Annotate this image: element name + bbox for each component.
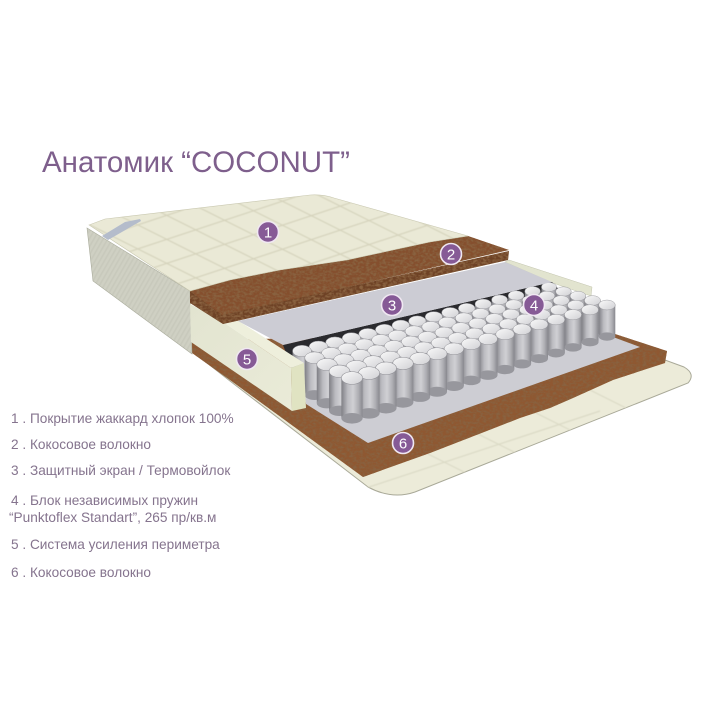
layer 5: perimeter reinforcement foam — [190, 304, 306, 411]
marker 3: 3 — [388, 298, 396, 314]
far perimeter foam strip — [505, 260, 592, 296]
layer 6: bottom coconut fibre — [192, 333, 667, 477]
legend item 5: 5 . Система усиления периметра — [11, 537, 220, 552]
marker 1 — [258, 222, 278, 242]
marker 3 — [382, 294, 402, 316]
legend list — [9, 411, 234, 580]
layer: bottom quilted cover — [207, 360, 692, 496]
mattress side panel — [87, 228, 192, 354]
marker 6: 6 — [399, 436, 407, 452]
legend item 4: 4 . Блок независимых пружин — [11, 493, 198, 508]
infographic: mattress anatomy — [10, 151, 692, 577]
marker 4: 4 — [530, 298, 538, 314]
layer 2: top coconut fibre — [190, 236, 509, 324]
legend item 1: 1 . Покрытие жаккард хлопок 100% — [11, 411, 234, 426]
dark cavity behind springs — [283, 282, 565, 395]
layer 1: quilted jacquard top — [88, 194, 468, 292]
marker 2 — [440, 244, 462, 264]
marker 2: 2 — [447, 246, 455, 264]
title: Анатомик “COCONUT” — [42, 146, 350, 179]
marker 5 — [236, 348, 258, 370]
marker 1: 1 — [264, 224, 272, 242]
brand label on mattress corner — [102, 219, 141, 240]
legend item 3: 3 . Защитный экран / Термовойлок — [11, 463, 231, 478]
layer: bottom protective screen — [300, 320, 640, 443]
legend item 2: 2 . Кокосовое волокно — [11, 437, 151, 452]
legend item 6: 6 . Кокосовое волокно — [11, 565, 151, 580]
marker 4 — [524, 294, 544, 316]
legend item 4: “Punktoflex Standart”, 265 пр/кв.м — [9, 510, 216, 525]
spring block — [292, 282, 615, 424]
marker 5: 5 — [243, 352, 251, 368]
marker 6 — [392, 432, 414, 454]
legend item 4 — [9, 493, 216, 525]
layer 3: protective screen — [238, 262, 552, 345]
